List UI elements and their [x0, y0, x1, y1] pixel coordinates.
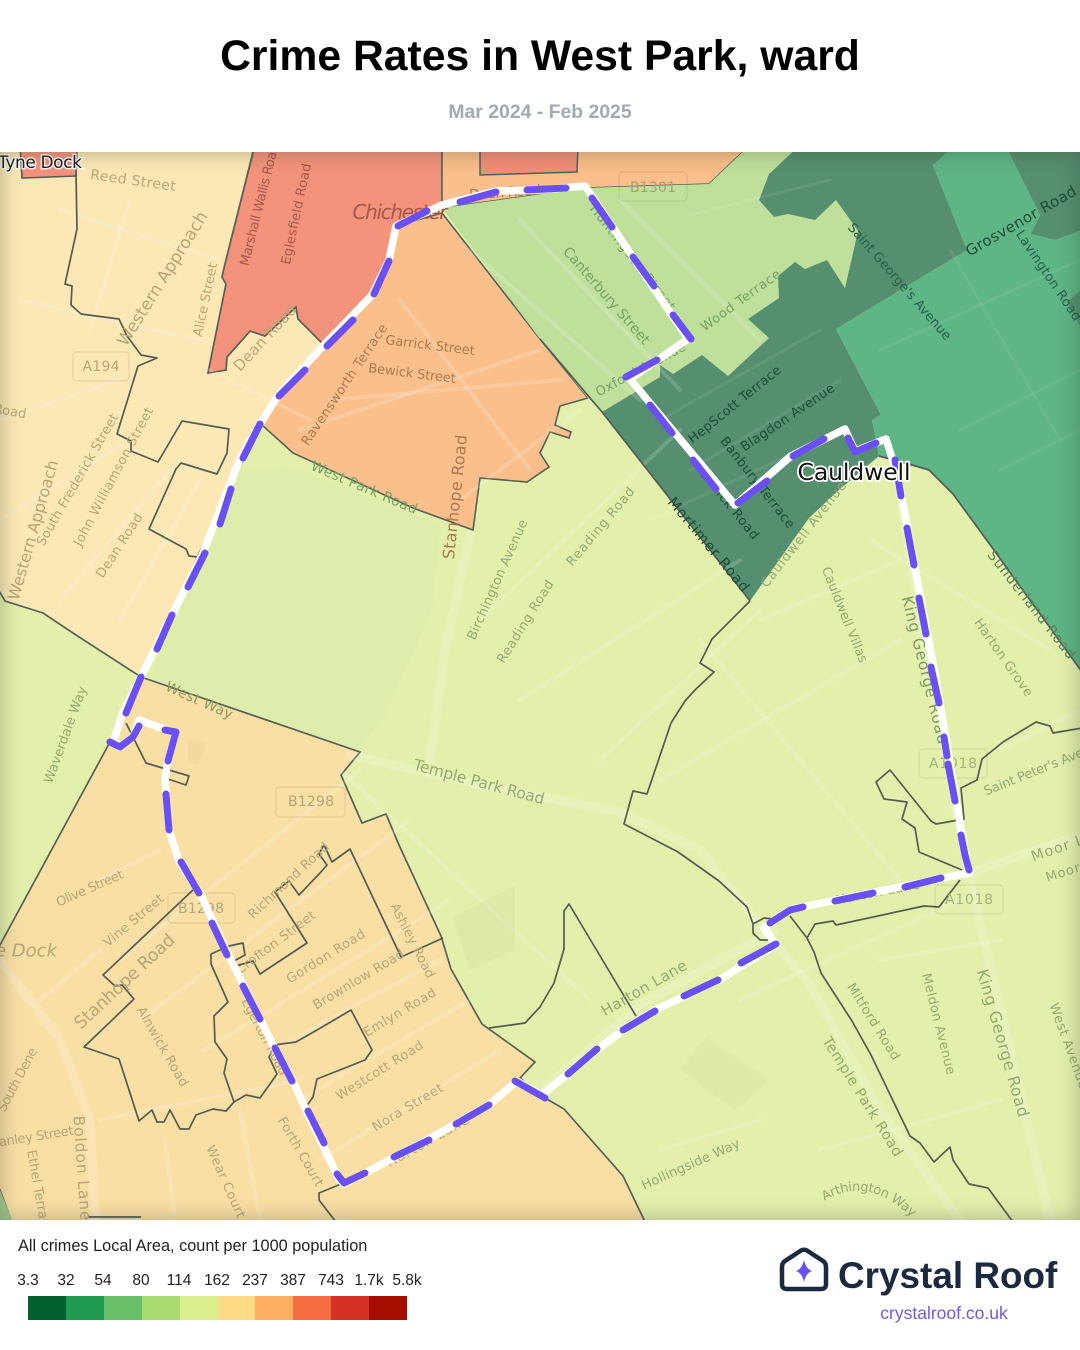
street labels: centre [465, 172, 784, 666]
street labels: green areas: Blagdon Avenue [738, 381, 838, 455]
region: bottom-left green [0, 1190, 14, 1225]
region: red Chichester area [208, 145, 442, 373]
region: mid green area [442, 145, 858, 412]
legend: 5.8k [392, 1272, 422, 1289]
street labels: centre: Canterbury Street [559, 244, 653, 348]
street labels: west and south-west: Stanhope Road [71, 930, 179, 1034]
street labels: west and south-west: B1298 [288, 794, 334, 810]
street labels: green areas [664, 182, 1080, 746]
street labels: south-east: Arthington Way [823, 1181, 916, 1216]
street labels: west and south-west: Emlyn Road [361, 985, 439, 1041]
legend: 743 [318, 1272, 344, 1289]
street labels: orange area [299, 322, 476, 560]
region: north-west yellow area [0, 145, 324, 677]
street labels: west and south-west: Richmond Road [245, 840, 333, 922]
date range subtitle: Mar 2024 - Feb 2025 [448, 101, 632, 123]
region: dark green sliver [1067, 287, 1080, 335]
street labels: orange area: Stanhope Road [439, 434, 471, 560]
street labels: west and south-west: Alnwick Road [133, 1004, 191, 1090]
place label: Tyne Dock: Tyne Dock [0, 153, 82, 173]
street labels: green areas: Harton Grove [970, 616, 1036, 700]
street labels: south-east: Meldon Avenue [918, 972, 958, 1076]
street labels: green areas: Saint George's Avenue [844, 220, 954, 344]
legend: 3.3 [17, 1272, 39, 1289]
street labels: green areas: Warwick Road [688, 457, 762, 543]
street labels: north-west: Western Approach [113, 208, 213, 350]
street labels: centre: Huntingdon Street [586, 202, 678, 314]
legend: 162 [204, 1272, 230, 1289]
website url: crystalroof.co.uk [880, 1303, 1008, 1323]
street labels: north-west: John Williamson Street [71, 405, 157, 550]
street labels: west and south-west: Waverdale Way [42, 684, 91, 785]
street labels: orange area: Garrick Street [384, 333, 476, 359]
title: Crime Rates in West Park, ward [220, 32, 860, 80]
street labels: orange area: West Park Road [308, 458, 420, 518]
region: dark green corner [1005, 145, 1080, 240]
street labels: west and south-west: Olive Street [54, 868, 126, 910]
region: dark green area [602, 145, 967, 601]
street labels: green areas: Sunderland Road [984, 548, 1078, 662]
logo [780, 1248, 1058, 1323]
street labels: south-east: Harton Lane [835, 878, 921, 908]
street labels: west and south-west: Boldon Lane [69, 1115, 95, 1220]
street labels: north-west [0, 143, 449, 602]
legend: 237 [242, 1272, 268, 1289]
legend: 80 [132, 1272, 150, 1289]
street labels: west and south-west: Wear Court [202, 1143, 248, 1220]
ward boundaries [65, 174, 1080, 1222]
ward route dashes [110, 188, 969, 1183]
legend: 32 [57, 1272, 75, 1289]
legend colour swatches [28, 1296, 407, 1320]
legend [17, 1237, 422, 1320]
street labels: north-west: Dean Road [230, 301, 300, 375]
legend title: All crimes Local Area, count per 1000 population [18, 1237, 367, 1255]
street labels: centre: B1301 [630, 180, 676, 196]
street labels: south-east: Mitford Road [843, 981, 903, 1063]
street labels: west and south-west: Gordon Road [284, 927, 368, 987]
street labels: green areas: Mortimer Road [664, 495, 752, 595]
street labels: south-east: A1018 [945, 892, 993, 908]
street labels: west and south-west [0, 679, 547, 1235]
street labels: west and south-west: Brownlow Road [311, 947, 407, 1013]
street labels: west and south-west: B1298 [178, 901, 224, 917]
street labels: west and south-west: Forth Court [274, 1114, 326, 1190]
legend: 54 [94, 1272, 112, 1289]
street labels: west and south-west: Ashley Road [387, 901, 437, 981]
region: top orange band [442, 145, 750, 208]
street labels: orange area: Bewick Street [367, 361, 457, 387]
region: orange area [262, 213, 588, 530]
street labels: north-west: Chichester [352, 200, 449, 224]
place label: Cauldwell: Cauldwell [798, 458, 910, 486]
street labels: south-east: King George Road [973, 967, 1033, 1119]
street labels: green areas: HepScott Terrace [686, 363, 784, 447]
street labels: green areas: Cauldwell Villas [818, 565, 870, 665]
region: small red at top left [20, 145, 77, 178]
choropleth map panel [0, 152, 1080, 1220]
legend: 387 [280, 1272, 306, 1289]
street labels: green areas: King George Road [898, 594, 952, 746]
street labels: north-west: Western Approach [4, 458, 62, 602]
street labels: green areas: Banbury Terrace [717, 434, 797, 532]
street labels: centre: Wood Terrace [698, 267, 784, 335]
street labels: west and south-west: Harton Lane [384, 1113, 472, 1171]
street labels: south-east [598, 737, 1080, 1216]
street labels: centre: Reading Road [494, 578, 558, 666]
street labels: north-west: Eglesfield Road [279, 162, 315, 266]
street labels: centre: Birchington Avenue [465, 518, 531, 642]
legend: 1.7k [354, 1272, 384, 1289]
region: medium green area [836, 145, 1080, 677]
street labels: north-west: Dean Road [94, 511, 146, 581]
street labels: north-west: A194 [82, 359, 120, 375]
street labels: green areas: Cauldwell Avenue [758, 479, 850, 591]
region: small red at top centre [480, 145, 578, 175]
street labels: west and south-west: Vine Street [101, 891, 167, 951]
street labels: centre: Oxford Avenue [593, 340, 689, 400]
street labels: north-west: Alice Street [191, 262, 221, 338]
street labels: west and south-west: Nora Street [370, 1081, 446, 1135]
street labels: west and south-west: Temple Park Road [411, 756, 547, 808]
street labels: green areas: Grosvenor Road [962, 182, 1080, 260]
street labels: west and south-west: Egerton Road [237, 996, 291, 1078]
street labels: orange area: Ravensworth Terrace [299, 322, 391, 448]
street labels: west and south-west: West Way [163, 679, 235, 723]
legend: 114 [167, 1272, 191, 1289]
region: park [150, 467, 441, 750]
street labels: south-east: Temple Park Road [818, 1033, 905, 1160]
street labels: west and south-west: Westcott Road [334, 1038, 426, 1104]
street labels: west and south-west: Crofton Street [233, 908, 319, 978]
street labels: south-east: Hollingside Way [640, 1136, 743, 1193]
street labels: south-east: Harton Lane [598, 956, 690, 1020]
legend scale numbers [17, 1272, 422, 1289]
street labels: centre: Reading Road [564, 485, 638, 569]
region: south yellow area [0, 677, 648, 1228]
ward route outline [114, 186, 969, 1184]
street labels: south-east: A1018 [929, 756, 977, 772]
brand name: Crystal Roof [838, 1255, 1057, 1296]
icon: house with star [780, 1248, 828, 1292]
place label: Dean Road top: Dean Road [469, 183, 541, 203]
street labels: north-west: South Frederick Street [34, 411, 122, 549]
street labels: north-west: Reed Street [89, 167, 177, 195]
